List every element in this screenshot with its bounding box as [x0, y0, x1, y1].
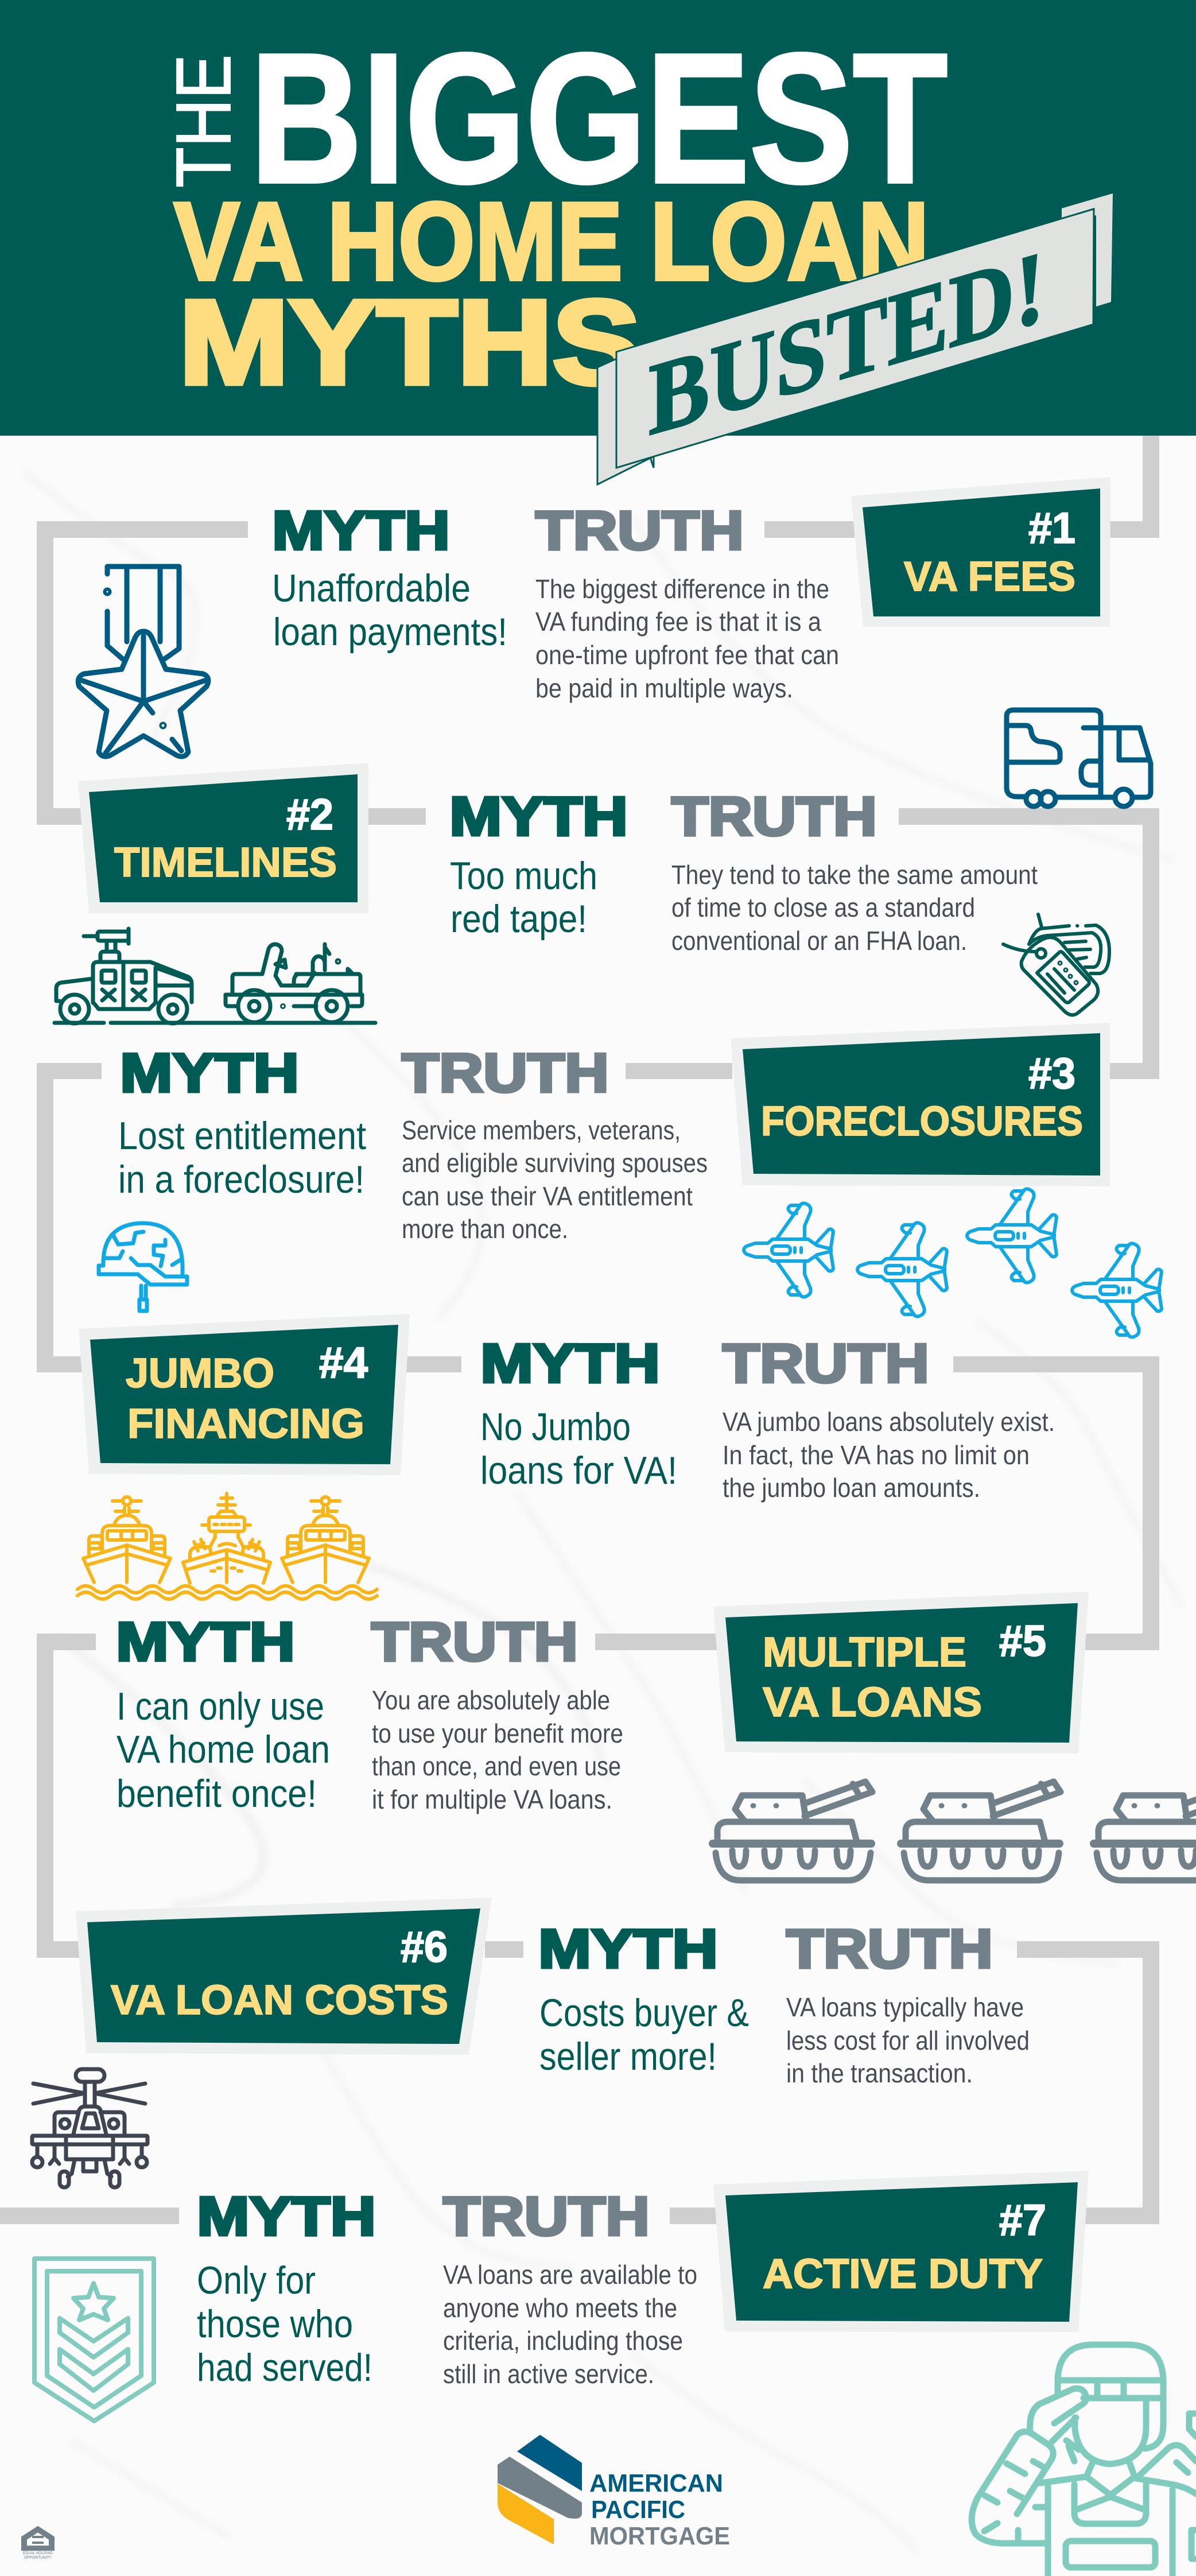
icon: helmet [99, 1223, 187, 1311]
title: THE [160, 55, 247, 188]
icon: military vehicles [55, 929, 375, 1023]
title [160, 15, 948, 409]
myth text 6 [539, 1991, 749, 2078]
truth text 6: VA loans typically have [786, 1992, 1024, 2022]
truth text 1 [535, 574, 839, 703]
myth text 3 [118, 1114, 366, 1201]
myth text 7 [197, 2259, 372, 2389]
truth text 1: The biggest difference in the [535, 574, 829, 604]
truth text 3: Service members, veterans, [402, 1115, 681, 1145]
truth text 7: VA loans are available to [443, 2260, 697, 2290]
card 5: multiple VA loans [713, 1592, 1089, 1753]
myth heading 4: MYTH [480, 1333, 660, 1394]
card 3: foreclosures: #3 [1028, 1049, 1075, 1098]
icon: equal housing: OPPORTUNITY [24, 2556, 52, 2560]
logo: AMERICAN [589, 2469, 723, 2497]
myth text 7: Only for [197, 2259, 316, 2302]
title: MYTHS [179, 276, 640, 409]
card 2: timelines: #2 [286, 790, 333, 839]
icon: equal housing: EQUAL HOUSING [23, 2551, 53, 2555]
myth heading 1: MYTH [272, 500, 450, 561]
card 3: foreclosures: FORECLOSURES [761, 1099, 1083, 1145]
myth text 1 [272, 567, 507, 654]
icon: dog tags [1003, 914, 1109, 1015]
card 1: VA fees: VA FEES [904, 554, 1075, 600]
truth text 2: of time to close as a standard [671, 893, 975, 922]
myth text 7: those who [197, 2302, 353, 2346]
truth text 4: the jumbo loan amounts. [723, 1473, 980, 1503]
truth text 2: conventional or an FHA loan. [671, 926, 967, 956]
truth heading 3: TRUTH [402, 1042, 609, 1104]
connector path lines [0, 436, 1159, 2224]
icon: ships [77, 1493, 377, 1599]
myth text 5: I can only use [117, 1685, 324, 1728]
icon: planes [744, 1189, 1162, 1337]
card 7: active duty: ACTIVE DUTY [763, 2251, 1043, 2297]
truth heading 5: TRUTH [371, 1611, 578, 1673]
card 6: VA loan costs [76, 1898, 492, 2055]
truth heading 7: TRUTH [443, 2186, 650, 2247]
truth text 4 [723, 1407, 1055, 1503]
icon: equal housing [22, 2527, 54, 2560]
truth text 5: You are absolutely able [372, 1685, 610, 1715]
myth heading 3: MYTH [120, 1042, 299, 1104]
card 1: VA fees [851, 477, 1110, 627]
truth text 5 [372, 1685, 623, 1814]
truth text 7: criteria, including those [443, 2326, 683, 2356]
truth heading 6: TRUTH [786, 1918, 993, 1980]
card 5: multiple VA loans: #5 [999, 1617, 1046, 1666]
title: BIGGEST [250, 15, 948, 222]
myth text 4: No Jumbo [480, 1405, 631, 1449]
truth text 6 [786, 1992, 1030, 2088]
myth text 4: loans for VA! [480, 1449, 677, 1492]
truth text 5: it for multiple VA loans. [372, 1784, 612, 1814]
myth text 5: VA home loan [117, 1728, 330, 1771]
card 4: jumbo financing: #4 [319, 1339, 368, 1387]
card 6: VA loan costs: #6 [401, 1923, 448, 1972]
card 7: active duty: #7 [999, 2196, 1046, 2245]
myth text 3: Lost entitlement [118, 1114, 366, 1158]
card 5: multiple VA loans: MULTIPLE [763, 1630, 966, 1675]
logo [498, 2435, 730, 2550]
card 4: jumbo financing: FINANCING [127, 1401, 364, 1447]
myth text 2 [450, 854, 597, 941]
truth text 1: be paid in multiple ways. [535, 673, 793, 703]
card 1: VA fees: #1 [1028, 504, 1075, 553]
truth text 5: to use your benefit more [372, 1718, 623, 1748]
truth text 5: than once, and even use [372, 1751, 621, 1781]
myth text 1: loan payments! [273, 610, 507, 654]
logo: PACIFIC [591, 2496, 685, 2524]
truth text 1: VA funding fee is that it is a [535, 607, 821, 637]
myth text 5: benefit once! [117, 1772, 317, 1815]
truth text 2: They tend to take the same amount [671, 860, 1038, 890]
card 2: timelines [78, 763, 368, 913]
icon: rank badge [34, 2259, 154, 2421]
icon: tanks [713, 1782, 1196, 1880]
truth heading 1: TRUTH [535, 500, 744, 561]
truth text 3: more than once. [402, 1214, 568, 1244]
truth text 7: anyone who meets the [443, 2293, 677, 2323]
myth text 2: Too much [450, 854, 597, 898]
myth text 6: Costs buyer & [539, 1991, 749, 2035]
title: VA HOME LOAN [174, 179, 929, 303]
myth text 3: in a foreclosure! [118, 1158, 364, 1201]
truth text 3: and eligible surviving spouses [402, 1148, 708, 1178]
icon: truck [1007, 710, 1151, 806]
myth text 2: red tape! [451, 897, 587, 941]
truth heading 4: TRUTH [723, 1333, 929, 1394]
truth text 2 [671, 860, 1038, 956]
myth heading 2: MYTH [449, 786, 628, 847]
myth text 7: had served! [197, 2346, 372, 2389]
logo: MORTGAGE [589, 2522, 730, 2550]
myth text 4 [480, 1405, 677, 1492]
myth text 5 [117, 1685, 330, 1815]
myth heading 6: MYTH [538, 1918, 718, 1980]
truth text 6: less cost for all involved [786, 2026, 1030, 2055]
card 4: jumbo financing: JUMBO [126, 1351, 274, 1396]
truth text 7 [443, 2260, 697, 2389]
truth text 6: in the transaction. [786, 2058, 973, 2088]
card 7: active duty [713, 2171, 1089, 2332]
myth heading 5: MYTH [116, 1611, 295, 1673]
truth text 4: In fact, the VA has no limit on [723, 1440, 1030, 1470]
myth heading 7: MYTH [197, 2186, 376, 2247]
myth text 6: seller more! [539, 2035, 717, 2078]
truth text 3 [402, 1115, 708, 1244]
icon: helicopter [32, 2069, 147, 2187]
icon: medal [78, 567, 208, 756]
card 6: VA loan costs: VA LOAN COSTS [111, 1977, 448, 2023]
truth text 3: can use their VA entitlement [402, 1181, 693, 1211]
card 4: jumbo financing [79, 1314, 410, 1475]
card 5: multiple VA loans: VA LOANS [763, 1679, 982, 1725]
truth text 1: one-time upfront fee that can [535, 640, 839, 670]
icon: saluting soldier [972, 2345, 1196, 2576]
truth heading 2: TRUTH [671, 786, 877, 847]
header band [0, 0, 1196, 436]
card 3: foreclosures [731, 1023, 1110, 1186]
card 2: timelines: TIMELINES [114, 840, 337, 886]
busted banner: BUSTED! [649, 228, 1045, 457]
truth text 7: still in active service. [443, 2359, 654, 2389]
truth text 4: VA jumbo loans absolutely exist. [723, 1407, 1055, 1437]
myth text 1: Unaffordable [272, 567, 471, 610]
